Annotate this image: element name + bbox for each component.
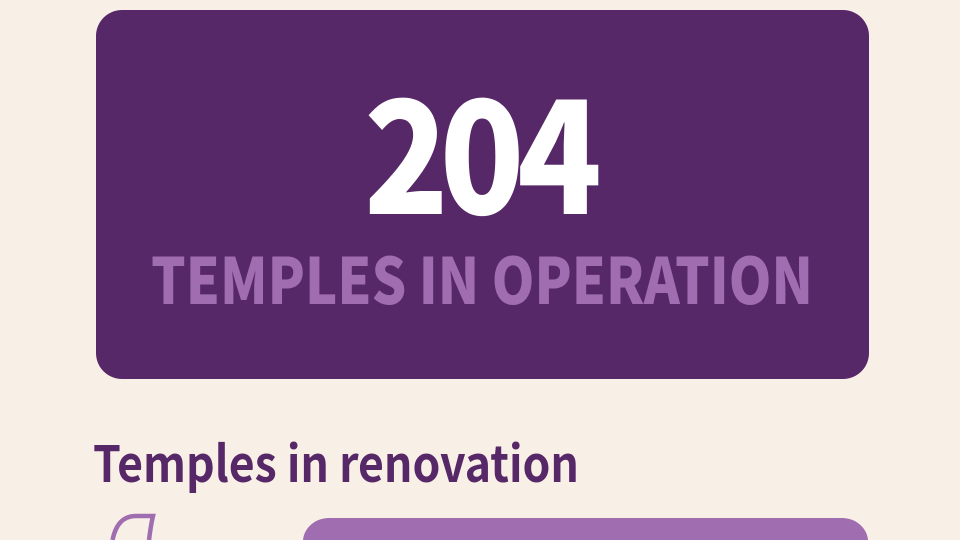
bar: renovation [303, 518, 868, 540]
heading: temples in renovation: Temples in renovation [93, 425, 579, 497]
icon: temple outline [112, 516, 153, 540]
panel: temples in operation [96, 10, 869, 379]
panel label: temples in operation: TEMPLES IN OPERATION [151, 231, 813, 323]
big number: 204: 204 [364, 37, 602, 259]
